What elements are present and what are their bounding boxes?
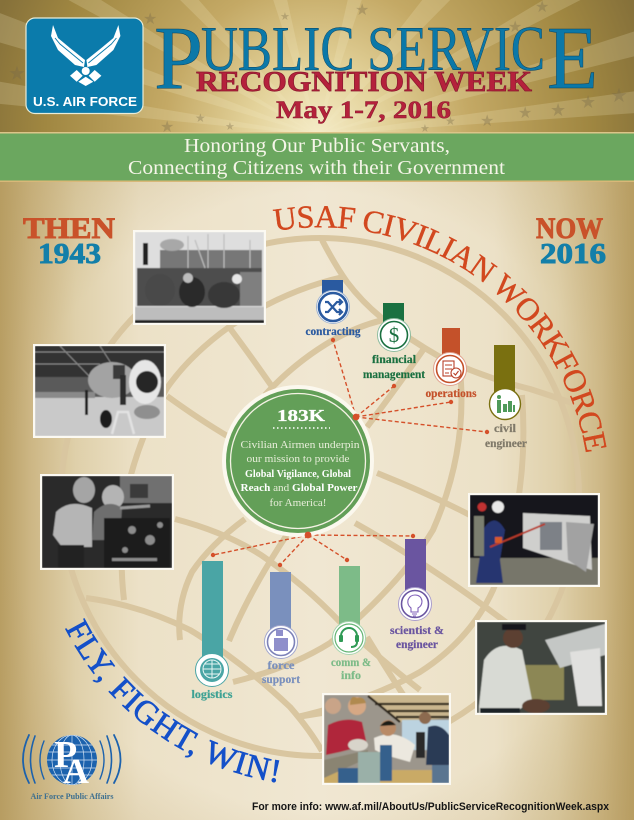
- subtitle: recognition week: RECOGNITION WEEK: [196, 66, 532, 98]
- node: logistics: logistics: [192, 689, 233, 701]
- icon: person and buildings: [497, 395, 515, 413]
- icon: globe with truck: [203, 660, 221, 678]
- background stars: ★: [420, 122, 430, 135]
- node: scientist and engineer: scientist &: [390, 625, 444, 637]
- page background: [0, 181, 634, 820]
- background stars: ★: [508, 17, 522, 36]
- title: P: [154, 9, 203, 108]
- icon: headset: [341, 628, 357, 647]
- background stars: ★: [280, 10, 290, 23]
- background stars: ★: [225, 120, 235, 133]
- title: UBLIC SERVIC: [201, 13, 545, 84]
- stat description: Global Vigilance, Global: [245, 469, 351, 480]
- node: scientist and engineer: engineer: [396, 639, 438, 651]
- now 2016: 2016: [540, 239, 606, 270]
- PA letters: A: [63, 751, 89, 791]
- background stars: ★: [518, 103, 532, 122]
- stat description: our mission to provide: [246, 454, 350, 465]
- public affairs logo: [23, 734, 120, 801]
- title: [154, 9, 598, 108]
- PA letters: P: [54, 734, 77, 776]
- then 1943: THEN: [23, 212, 115, 245]
- broadcast arcs: [23, 735, 120, 783]
- title: E: [547, 9, 598, 108]
- globe line art: [61, 238, 579, 756]
- footer url: For more info: www.af.mil/AboutUs/PublicServiceRecognitionWeek.aspx: [252, 801, 609, 813]
- icon: service member badge: [274, 630, 288, 651]
- background stars: [8, 0, 628, 136]
- icon: shuffle arrows: [325, 299, 342, 315]
- node: civil engineer: engineer: [485, 438, 527, 450]
- node: force support: support: [262, 674, 300, 686]
- background stars: ★: [355, 0, 369, 19]
- background stars: ★: [580, 92, 596, 113]
- node: contracting: [306, 280, 361, 338]
- now 2016: NOW: [536, 212, 603, 245]
- node: comm and info: info: [341, 670, 361, 682]
- air force logo: [26, 18, 143, 114]
- logo wordmark: U.S. AIR FORCE: [33, 94, 137, 109]
- photo: aircraft factory: [33, 344, 166, 438]
- stat value: 183K: [277, 406, 326, 425]
- node: financial management: [363, 303, 425, 381]
- public affairs logo: Air Force Public Affairs: [30, 791, 114, 801]
- then 1943: [23, 212, 115, 270]
- globe grid: [47, 735, 97, 785]
- arc heading: usaf civilian workforce: USAF CIVILIAN WORKFORCE: [272, 206, 606, 452]
- node: financial management: management: [363, 369, 425, 381]
- background stars: ★: [550, 100, 566, 121]
- PA letters: [54, 734, 89, 791]
- icon: wing feather lines: [55, 38, 116, 63]
- node: logistics: [192, 561, 233, 701]
- header banner: [0, 0, 634, 136]
- background stars: ★: [8, 61, 26, 85]
- photo: electrical worker: [468, 493, 600, 587]
- node: force support: [262, 572, 300, 686]
- node: civil engineer: civil: [494, 423, 516, 435]
- node: force support: force: [268, 660, 294, 672]
- background stars: ★: [160, 117, 174, 136]
- node: comm and info: [331, 566, 371, 682]
- then 1943: 1943: [38, 239, 101, 270]
- sunburst rays: [0, 0, 634, 135]
- stat description: [240, 440, 360, 509]
- icon: dollar sign: $: [389, 323, 399, 347]
- node: contracting: contracting: [306, 326, 361, 338]
- now 2016: [536, 212, 606, 270]
- connector lines: lower: [211, 534, 415, 567]
- background stars: ★: [610, 83, 628, 107]
- connector lines: upper: [331, 338, 489, 434]
- photo: women machinists: [40, 474, 174, 570]
- green tagline band: [0, 132, 634, 182]
- stat description: for America!: [270, 498, 326, 509]
- photo: welders on deck: [133, 230, 266, 325]
- photo: aircraft mechanic: [475, 620, 607, 715]
- icon: air force wings: [51, 25, 120, 86]
- arc slogan: fly fight win: FLY, FIGHT, WIN!: [65, 618, 280, 782]
- central stat circle: [222, 385, 374, 538]
- green tagline band: Honoring Our Public Servants,: [184, 135, 450, 157]
- node: civil engineer: [485, 345, 527, 450]
- background stars: ★: [143, 9, 157, 28]
- stat description: Civilian Airmen underpin: [240, 440, 360, 451]
- background stars: ★: [445, 114, 456, 128]
- background stars: ★: [195, 111, 206, 125]
- stat description: Reach and Global Power: [240, 483, 358, 494]
- icon: head with bulb: [408, 595, 422, 616]
- background stars: ★: [480, 111, 494, 130]
- node: scientist and engineer: [390, 539, 444, 651]
- node: comm and info: comm &: [331, 657, 371, 669]
- photo: team outdoors: [322, 693, 451, 785]
- node: operations: [426, 328, 477, 400]
- green tagline band: Connecting Citizens with their Government: [128, 157, 505, 179]
- node: financial management: financial: [372, 354, 416, 366]
- date: May 1-7, 2016: [276, 97, 451, 124]
- node: operations: operations: [426, 388, 477, 400]
- icon: checklist: [443, 361, 461, 378]
